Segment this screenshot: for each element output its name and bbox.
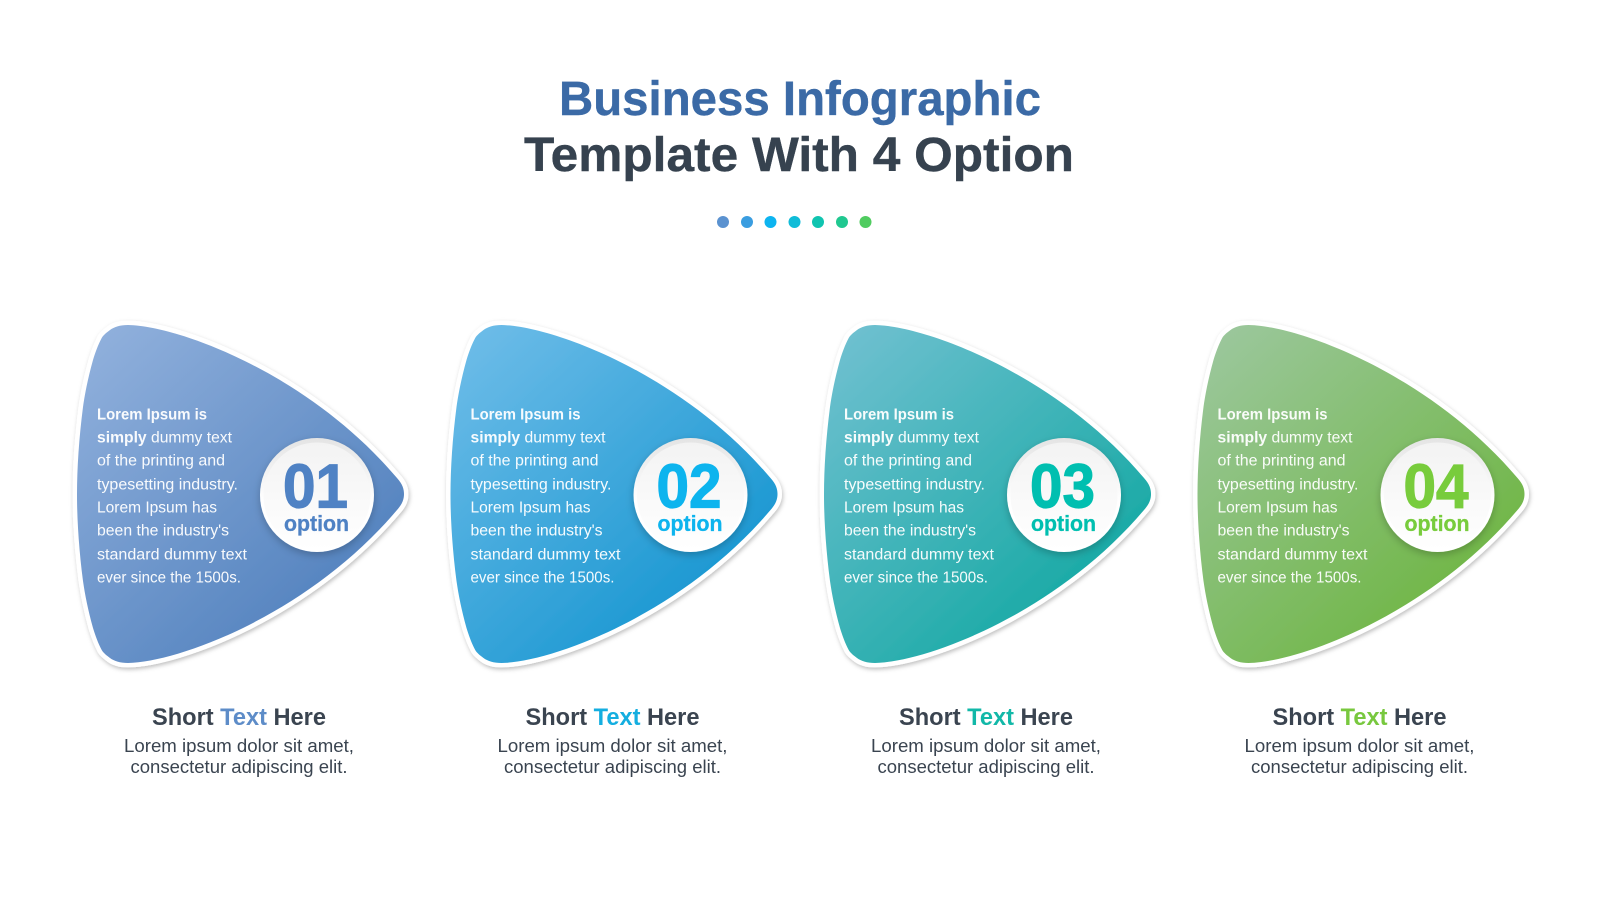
description 03: typesetting industry.: [844, 476, 985, 494]
description 04: Lorem Ipsum has: [1218, 500, 1338, 516]
badge 03: 03: [1030, 452, 1095, 522]
description 03: been the industry's: [844, 522, 976, 540]
caption 02: consectetur adipiscing elit.: [504, 757, 721, 777]
caption 02: [498, 704, 728, 777]
badge 04: [1380, 438, 1494, 552]
badge 02: option: [658, 511, 722, 536]
badge 03: [1007, 438, 1121, 552]
description 03: Lorem Ipsum has: [844, 500, 964, 516]
description 03: Lorem Ipsum is: [844, 406, 954, 424]
shape 01: [77, 325, 404, 663]
caption 04: Lorem ipsum dolor sit amet,: [1244, 736, 1474, 756]
shape 04: [1198, 325, 1524, 663]
description 01: been the industry's: [97, 522, 229, 540]
panel: option 02: [450, 325, 778, 777]
description 03: ever since the 1500s.: [844, 570, 988, 586]
panel: option 01: [77, 325, 404, 777]
description 01: Lorem Ipsum has: [97, 500, 217, 516]
caption 02: Short Text Here: [526, 704, 700, 731]
description 01: simply dummy text: [97, 430, 233, 446]
panel: option 03: [824, 325, 1151, 777]
description 02: standard dummy text: [470, 546, 621, 564]
title: [524, 73, 1074, 182]
caption 03: Lorem ipsum dolor sit amet,: [871, 736, 1101, 756]
badge 04: option: [1404, 511, 1470, 536]
caption 01: [124, 704, 354, 777]
badge 01: option: [284, 511, 349, 536]
shape 03: [824, 325, 1151, 663]
caption 01: Lorem ipsum dolor sit amet,: [124, 736, 354, 756]
description 04: typesetting industry.: [1218, 476, 1358, 494]
badge 04: 04: [1404, 452, 1469, 522]
description 02: typesetting industry.: [470, 476, 612, 494]
description 04: [1218, 406, 1368, 586]
description 02: Lorem Ipsum has: [470, 500, 591, 516]
title: Business Infographic: [559, 73, 1041, 126]
caption 01: Short Text Here: [152, 704, 326, 731]
description 01: standard dummy text: [97, 546, 248, 564]
caption 04: [1244, 704, 1474, 777]
caption 03: Short Text Here: [899, 704, 1073, 731]
description 02: simply dummy text: [470, 430, 606, 446]
badge 02: 02: [656, 452, 722, 522]
caption 04: Short Text Here: [1272, 704, 1446, 731]
caption 02: Lorem ipsum dolor sit amet,: [498, 736, 728, 756]
description 01: Lorem Ipsum is: [97, 406, 207, 424]
description 04: of the printing and: [1218, 452, 1346, 470]
description 02: of the printing and: [470, 452, 598, 470]
description 04: simply dummy text: [1218, 430, 1353, 446]
badge 01: 01: [283, 452, 348, 522]
description 03: simply dummy text: [844, 430, 980, 446]
description 02: been the industry's: [470, 522, 603, 540]
dots row: [717, 216, 872, 228]
badge 03: option: [1031, 511, 1096, 536]
shape 02: [450, 325, 778, 663]
caption 03: [871, 704, 1101, 777]
caption 04: consectetur adipiscing elit.: [1251, 757, 1468, 777]
description 01: [97, 406, 248, 586]
description 04: been the industry's: [1218, 522, 1350, 540]
badge 01: [260, 438, 374, 552]
description 04: Lorem Ipsum is: [1218, 406, 1328, 424]
description 02: Lorem Ipsum is: [470, 406, 580, 424]
description 03: [844, 406, 995, 586]
panel: option 04: [1198, 325, 1524, 777]
description 03: standard dummy text: [844, 546, 995, 564]
caption 03: consectetur adipiscing elit.: [878, 757, 1094, 777]
description 01: ever since the 1500s.: [97, 570, 241, 586]
description 01: typesetting industry.: [97, 476, 238, 494]
badge 02: [634, 438, 748, 552]
title: Template With 4 Option: [524, 129, 1074, 182]
description 02: ever since the 1500s.: [470, 570, 614, 586]
description 04: ever since the 1500s.: [1218, 570, 1362, 586]
description 03: of the printing and: [844, 452, 972, 470]
description 01: of the printing and: [97, 452, 225, 470]
description 04: standard dummy text: [1218, 546, 1368, 564]
caption 01: consectetur adipiscing elit.: [130, 757, 348, 777]
description 02: [470, 406, 621, 586]
